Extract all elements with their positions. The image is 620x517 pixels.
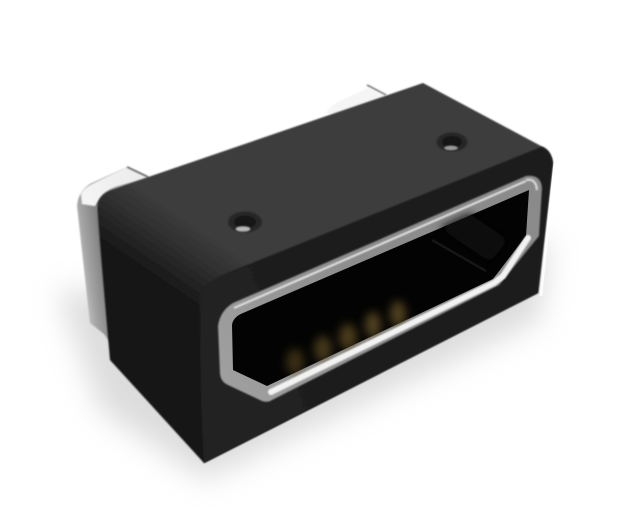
mounting hole right <box>436 132 468 152</box>
connector housing <box>97 83 555 463</box>
rim corner highlight <box>526 180 537 190</box>
top and left side face <box>97 83 553 463</box>
gold contacts <box>286 301 406 375</box>
rear metal pin right <box>326 85 386 114</box>
bottom rim highlight <box>271 238 528 392</box>
cast shadow <box>58 240 550 480</box>
tongue floor line <box>432 240 486 271</box>
plate top highlight <box>81 167 148 206</box>
top rim highlight <box>234 181 526 308</box>
mounting hole left <box>228 212 262 232</box>
port cavity <box>232 190 529 386</box>
port opening <box>218 176 542 402</box>
metal rim <box>218 176 542 402</box>
inner tongue <box>440 214 508 262</box>
right edge halo <box>541 160 555 296</box>
front face <box>200 147 553 463</box>
rear metal pin left <box>127 167 148 177</box>
metal back plate <box>77 167 150 345</box>
